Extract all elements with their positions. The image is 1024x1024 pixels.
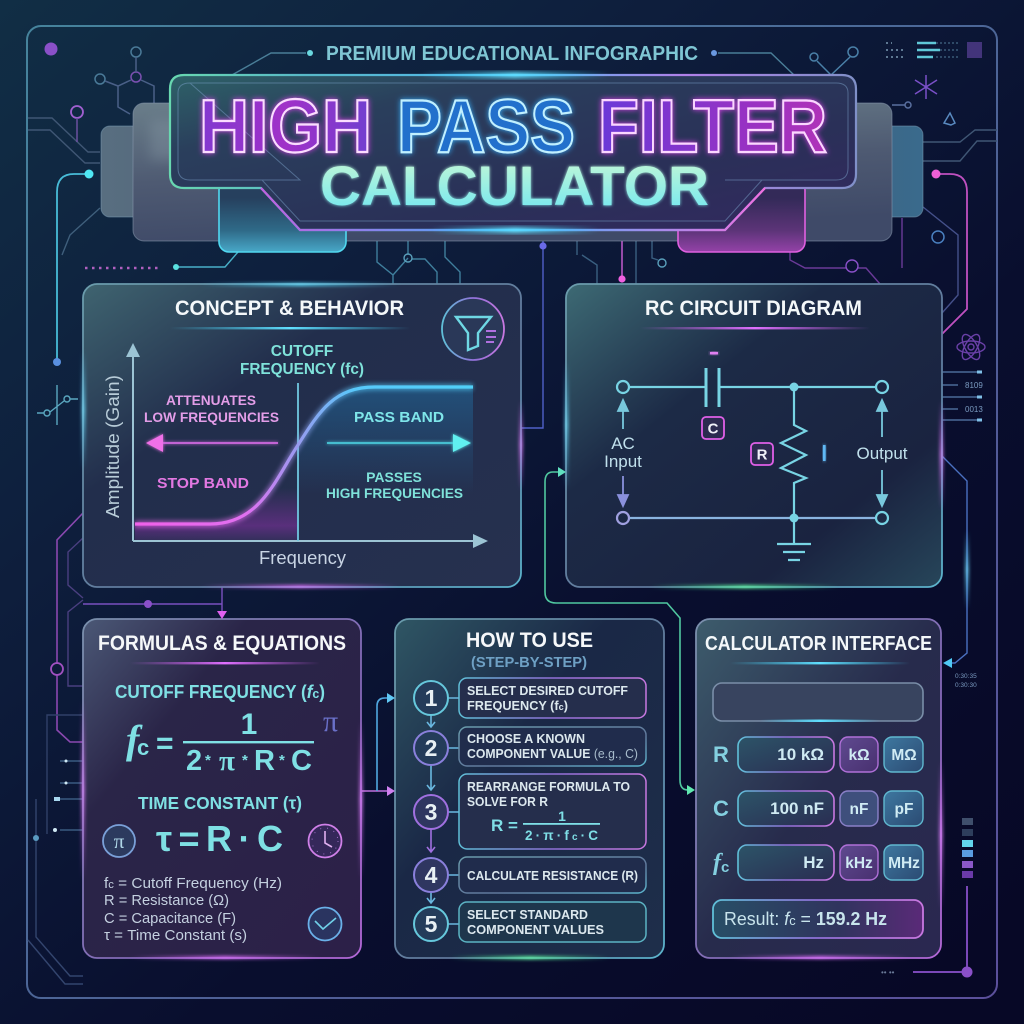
glows <box>420 72 610 78</box>
step 5: SELECT STANDARD <box>467 908 588 922</box>
atom icon and small readouts: 0013 <box>965 405 983 414</box>
cutoff frequency formula: * <box>279 752 285 769</box>
title banner <box>170 72 856 233</box>
AC input label: Input <box>604 452 642 471</box>
axes <box>126 343 488 548</box>
label: resistor <box>751 443 773 465</box>
step 4: CALCULATE RESISTANCE (R) <box>467 869 638 883</box>
row labels: C <box>713 796 729 821</box>
row fc: Hz <box>803 853 824 872</box>
row R: kΩ <box>848 747 870 764</box>
inner outline <box>178 83 848 221</box>
panel: concept and behavior <box>82 283 522 588</box>
arrow tips <box>144 467 952 796</box>
icon: pi badge: π <box>114 829 125 853</box>
polarity mark <box>710 352 718 354</box>
atom icon and small readouts: 0:30:35 <box>955 673 977 680</box>
panel: RC circuit diagram <box>565 284 943 588</box>
step 4: 4 <box>425 862 438 888</box>
small indicator dots left <box>33 760 68 841</box>
result: Result: fc = 159.2 Hz <box>724 909 887 929</box>
legend: R = Resistance (Ω) <box>104 892 229 909</box>
icon: switch symbol <box>37 385 78 425</box>
pass band labels: PASS BAND <box>354 409 444 426</box>
output label: Output <box>856 444 908 463</box>
area fills under curve <box>135 445 298 540</box>
step 4 <box>414 857 646 893</box>
heading: high pass filter: FILTER <box>598 84 827 168</box>
cutoff label: CUTOFF <box>271 343 333 360</box>
legend: fc = Cutoff Frequency (Hz) <box>104 875 282 892</box>
decoration: molecules and small marks <box>44 42 982 268</box>
heading: RC CIRCUIT DIAGRAM <box>645 297 862 320</box>
row C: 100 nF <box>770 799 824 818</box>
cutoff frequency formula: * <box>205 752 211 769</box>
cutoff frequency formula: 1 <box>241 708 257 741</box>
cutoff frequency formula: c <box>137 735 149 760</box>
heading: CALCULATOR INTERFACE <box>705 633 932 655</box>
heading: high pass filter: HIGH <box>199 84 372 168</box>
icon: pi badge <box>103 825 135 857</box>
row labels: f <box>713 850 723 876</box>
heading: CONCEPT & BEHAVIOR <box>175 297 404 320</box>
atom icon and small readouts <box>881 332 985 977</box>
heading: HOW TO USE <box>466 629 593 652</box>
step 3: REARRANGE FORMULA TO <box>467 780 630 794</box>
step 3: 1 <box>558 808 566 824</box>
panel: formulas and equations <box>82 619 362 959</box>
icon: clock <box>308 824 342 858</box>
panel: calculator interface <box>696 619 942 959</box>
circuit nodes <box>790 382 798 522</box>
step 2: 2 <box>425 735 437 761</box>
step 5: 5 <box>425 911 438 937</box>
cutoff frequency formula: = <box>156 727 174 760</box>
cutoff frequency formula: R <box>254 745 275 777</box>
heading: high pass filter <box>199 84 827 168</box>
cutoff frequency formula: π <box>219 745 235 777</box>
step 3 <box>414 774 646 849</box>
panel: concept and behavior: LOW FREQUENCIES <box>144 409 279 425</box>
high pass curve <box>135 387 473 524</box>
label: capacitor: C <box>708 420 719 438</box>
step 2 <box>414 727 646 766</box>
row R <box>738 737 923 772</box>
legend <box>104 875 282 944</box>
heading: high pass filter: PASS <box>397 84 575 168</box>
label: capacitor <box>702 417 724 439</box>
stop band labels: ATTENUATES <box>166 392 256 408</box>
result <box>713 900 923 938</box>
lower neon edge <box>261 188 765 230</box>
row fc <box>738 845 923 880</box>
row fc: MHz <box>888 855 920 872</box>
step 3: 3 <box>425 799 437 825</box>
banner back plates <box>101 103 923 252</box>
legend: C = Capacitance (F) <box>104 910 236 927</box>
panel: concept and behavior: STOP BAND <box>157 475 249 492</box>
cutoff frequency formula: C <box>291 745 312 777</box>
axis labels: Amplitude (Gain) <box>103 375 123 518</box>
arrow: pass right <box>327 434 471 452</box>
row C: nF <box>850 801 868 818</box>
eyebrow text: PREMIUM EDUCATIONAL INFOGRAPHIC <box>326 43 698 65</box>
time constant formula <box>138 793 302 859</box>
row C <box>738 791 923 826</box>
step 2: CHOOSE A KNOWN <box>467 732 585 746</box>
level bars <box>962 818 973 878</box>
step 1: 1 <box>425 685 438 711</box>
step 5: COMPONENT VALUES <box>467 923 604 937</box>
signal arrows <box>618 400 887 506</box>
icon: clock two <box>308 908 342 940</box>
atom icon and small readouts: •• •• <box>881 968 895 977</box>
step 3: 2·π·f c·C <box>525 828 598 843</box>
panel: how to use: (STEP-BY-STEP) <box>471 654 587 671</box>
row C: pF <box>895 801 913 818</box>
step 3: R = <box>491 816 518 835</box>
atom icon and small readouts: 0:30:30 <box>955 682 977 689</box>
row labels <box>713 742 729 876</box>
cutoff frequency formula: * <box>242 752 248 769</box>
cutoff frequency formula: 2 <box>186 745 202 777</box>
cutoff frequency formula: CUTOFF FREQUENCY (fc) <box>115 682 325 702</box>
panel: concept and behavior: Frequency <box>259 548 346 568</box>
step connectors <box>427 698 459 924</box>
panel: concept and behavior: HIGH FREQUENCIES <box>326 485 463 501</box>
step 3: SOLVE FOR R <box>467 795 548 809</box>
AC input label <box>604 434 642 471</box>
row R: MΩ <box>891 747 917 764</box>
glow: trace highlight <box>966 530 968 610</box>
cutoff line <box>297 383 299 541</box>
step 2: COMPONENT VALUE (e.g., C) <box>467 747 638 761</box>
cutoff frequency formula <box>115 682 325 777</box>
panel: concept and behavior: PASSES <box>366 469 422 485</box>
atom icon and small readouts: 8109 <box>965 381 983 390</box>
time constant formula: TIME CONSTANT (τ) <box>138 793 302 813</box>
panel: concept and behavior: FREQUENCY (fc) <box>240 361 364 378</box>
circuit wires <box>617 368 888 560</box>
step 1: SELECT DESIRED CUTOFF <box>467 684 628 698</box>
panel: how to use <box>395 619 664 960</box>
pi glyph: π <box>323 705 338 738</box>
cutoff frequency formula: f <box>126 717 143 762</box>
AC input label: AC <box>611 434 635 453</box>
heading: FORMULAS & EQUATIONS <box>98 632 346 655</box>
current marker <box>823 445 826 461</box>
label: resistor: R <box>757 446 768 464</box>
arrow: attenuate left <box>146 434 278 452</box>
step 1: FREQUENCY (fc) <box>467 699 568 713</box>
row labels: R <box>713 742 729 767</box>
row fc: kHz <box>845 855 873 872</box>
display <box>713 683 923 722</box>
step 1 <box>414 678 646 718</box>
icon: funnel <box>442 298 504 360</box>
row R: 10 kΩ <box>777 745 824 764</box>
heading: calculator: CALCULATOR <box>320 154 709 217</box>
row labels: c <box>721 859 729 876</box>
legend: τ = Time Constant (s) <box>104 927 247 944</box>
step 5 <box>414 902 646 942</box>
banner plate <box>170 75 856 230</box>
time constant formula: τ = R · C <box>156 818 283 859</box>
